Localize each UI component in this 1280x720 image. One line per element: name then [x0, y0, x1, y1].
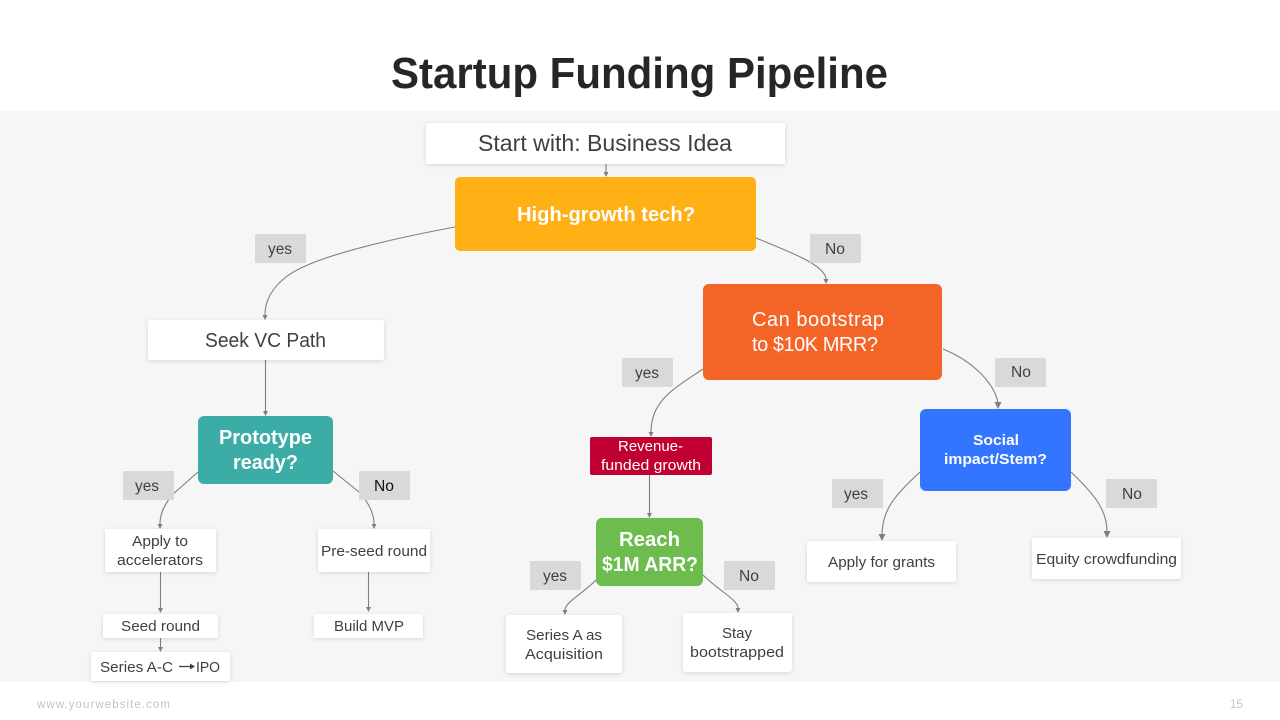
decision: high-growth tech: High-growth tech?	[517, 204, 695, 226]
tag: no reach	[724, 561, 775, 590]
box: build MVP	[314, 614, 423, 638]
footer website: www.yourwebsite.com	[36, 699, 170, 711]
box: series A-C to IPO: IPO	[196, 659, 220, 676]
tag: yes high-growth: yes	[268, 241, 292, 258]
box: apply to accelerators: accelerators	[117, 552, 203, 569]
tag: no high-growth	[810, 234, 861, 263]
title: Startup Funding Pipeline	[391, 49, 888, 98]
arrow: prototype yes to accelerators	[158, 472, 198, 529]
decision: social impact: impact/Stem?	[944, 451, 1047, 468]
box: equity crowdfunding	[1032, 538, 1181, 579]
decision: social impact	[920, 409, 1071, 491]
box: seek VC path	[148, 320, 384, 360]
tag: yes prototype: yes	[135, 478, 159, 495]
page number: 15	[1230, 697, 1243, 711]
box: revenue-funded growth: funded growth	[601, 457, 701, 474]
tag: no social: No	[1122, 486, 1142, 503]
arrow: social no to crowdfunding	[1071, 472, 1110, 538]
box: stay bootstrapped	[683, 613, 792, 672]
tag: no reach: No	[739, 568, 759, 585]
box: apply to accelerators	[105, 529, 216, 572]
decision: high-growth tech	[455, 177, 756, 251]
tag: no social	[1106, 479, 1157, 508]
start box: business idea: Start with: Business Idea	[478, 130, 732, 156]
box: apply for grants	[807, 541, 956, 582]
tag: no bootstrap	[995, 358, 1046, 387]
box: series A as acquisition: Series A as	[526, 627, 602, 644]
box: seed round	[103, 614, 218, 638]
box: seed round: Seed round	[121, 618, 200, 635]
tag: no prototype: No	[374, 478, 394, 495]
box: series A as acquisition: Acquisition	[525, 646, 603, 663]
box: apply to accelerators: Apply to	[132, 533, 188, 550]
arrow: reach no to stay bootstrapped	[703, 575, 740, 613]
tag: yes bootstrap	[622, 358, 673, 387]
start box: business idea	[426, 123, 785, 164]
decision: prototype ready: Prototype	[219, 427, 312, 449]
box: build MVP: Build MVP	[334, 618, 404, 635]
decision: prototype ready	[198, 416, 333, 484]
decision: can bootstrap: Can bootstrap	[752, 309, 884, 331]
box: equity crowdfunding: Equity crowdfunding	[1036, 551, 1177, 568]
box: revenue-funded growth: Revenue-	[618, 438, 683, 455]
decision: reach 1M ARR: Reach	[619, 529, 680, 551]
tag: no bootstrap: No	[1011, 364, 1031, 381]
arrow: seed round to series	[158, 638, 163, 652]
arrow: accelerators to seed round	[158, 572, 163, 613]
box: pre-seed round	[318, 529, 430, 572]
tag: yes bootstrap: yes	[635, 365, 659, 382]
decision: can bootstrap	[703, 284, 942, 380]
decision: reach 1M ARR	[596, 518, 703, 586]
box: apply for grants: Apply for grants	[828, 554, 935, 571]
tag: yes social	[832, 479, 883, 508]
arrow: high-growth yes to seek VC	[262, 227, 455, 320]
arrow: prototype no to pre-seed	[333, 471, 376, 529]
tag: yes reach	[530, 561, 581, 590]
tag: no prototype	[359, 471, 410, 500]
tag: no high-growth: No	[825, 241, 845, 258]
arrow: reach yes to series A	[562, 579, 597, 615]
decision: prototype ready: ready?	[233, 452, 298, 474]
box: stay bootstrapped: Stay	[722, 625, 752, 642]
arrow: pre-seed to build MVP	[366, 572, 371, 612]
arrow: bootstrap yes to revenue	[648, 369, 703, 437]
arrow: social yes to grants	[878, 472, 920, 541]
arrow: revenue to reach	[647, 475, 652, 518]
decision: reach 1M ARR: $1M ARR?	[602, 554, 698, 576]
box: series A as acquisition	[506, 615, 622, 673]
arrow: seek VC to prototype	[263, 360, 268, 416]
tag: yes high-growth	[255, 234, 306, 263]
box: seek VC path: Seek VC Path	[205, 330, 326, 352]
box: series A-C to IPO	[91, 652, 230, 681]
decision: social impact: Social	[973, 432, 1019, 449]
box: pre-seed round: Pre-seed round	[321, 543, 427, 560]
tag: yes social: yes	[844, 486, 868, 503]
arrow: bootstrap no to social	[943, 349, 1002, 409]
box: series A-C to IPO: Series A-C	[100, 659, 173, 676]
box: revenue-funded growth	[590, 437, 712, 475]
decision: can bootstrap: to $10K MRR?	[752, 334, 878, 356]
arrow: high-growth no to bootstrap	[756, 238, 828, 284]
tag: yes prototype	[123, 471, 174, 500]
tag: yes reach: yes	[543, 568, 567, 585]
arrow: start to high-growth	[604, 164, 608, 177]
box: stay bootstrapped: bootstrapped	[690, 644, 784, 661]
background panel	[0, 111, 1280, 682]
